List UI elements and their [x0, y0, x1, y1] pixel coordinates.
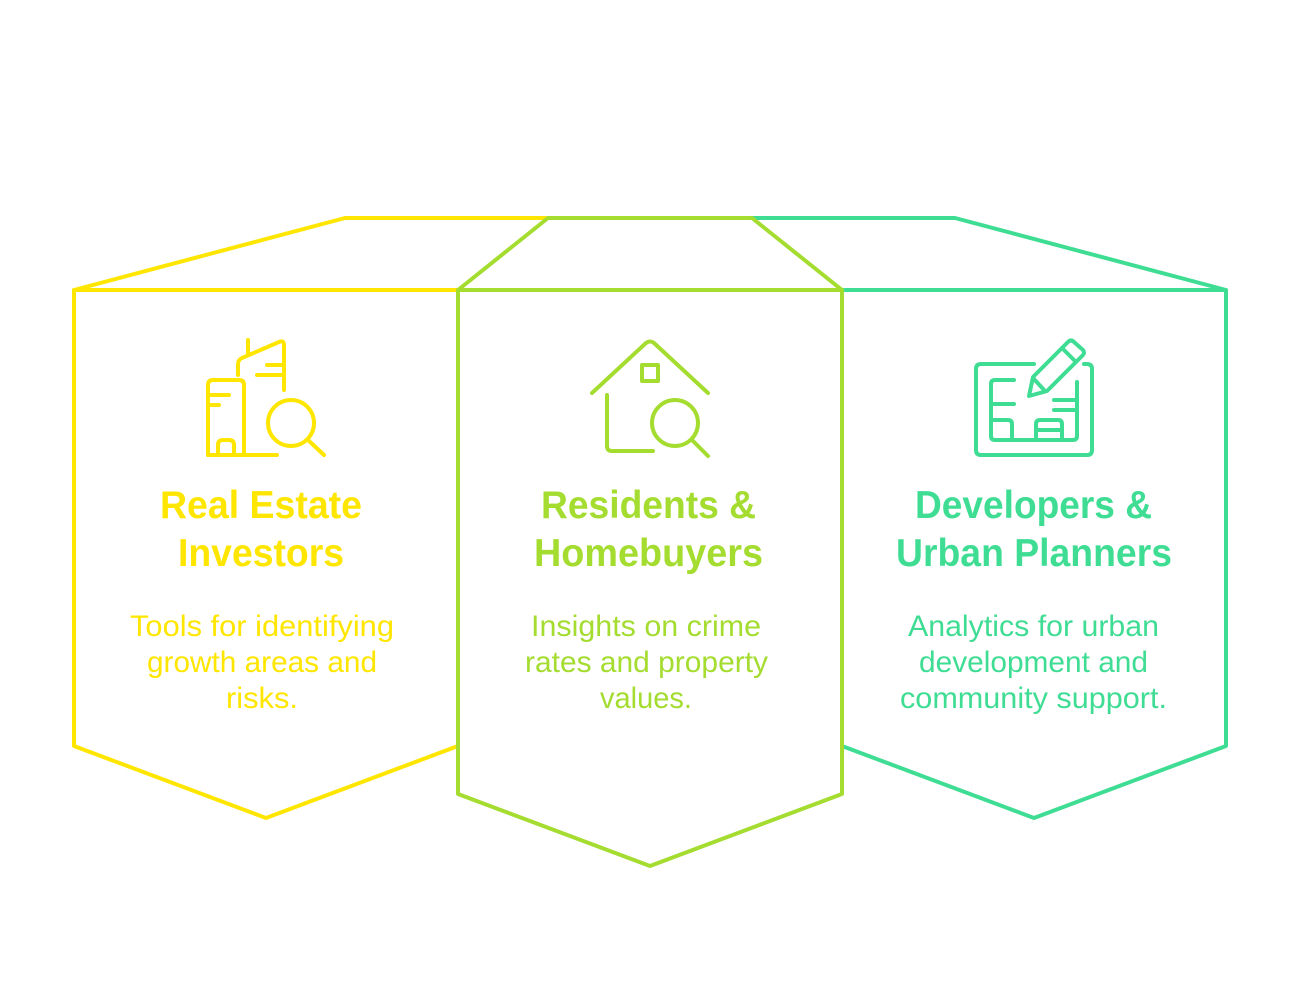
text: developers description: Analytics for urban	[908, 610, 1159, 643]
panel outline: real estate investors	[74, 218, 650, 818]
text: developers description: development and	[919, 646, 1148, 679]
icon: buildings with magnifier	[208, 340, 324, 455]
icon: house with magnifier	[592, 342, 708, 456]
text: residents description: Insights on crime	[531, 610, 761, 643]
text: real estate investors description: growth areas and	[147, 646, 377, 679]
heading: residents and homebuyers: Residents &	[541, 484, 756, 527]
panel: developers and urban planners	[650, 218, 1226, 818]
panel outline: residents and homebuyers	[458, 218, 842, 866]
text: developers description: community support.	[900, 682, 1167, 715]
panel outline: developers and urban planners	[650, 218, 1226, 818]
text: residents description: values.	[600, 682, 692, 715]
panel: residents and homebuyers	[458, 218, 842, 866]
text: residents description: rates and property	[525, 646, 768, 679]
heading: real estate investors: Real Estate	[160, 484, 362, 527]
heading: real estate investors: Investors	[178, 532, 344, 575]
text: real estate investors description: Tools for identifying	[130, 610, 394, 643]
heading: developers and urban planners: Developers &	[915, 484, 1152, 527]
icon: blueprint with pencil	[976, 340, 1092, 455]
heading: developers and urban planners: Urban Planners	[896, 532, 1172, 575]
heading: residents and homebuyers: Homebuyers	[534, 532, 763, 575]
panel: real estate investors	[74, 218, 650, 818]
text: real estate investors description: risks.	[226, 682, 298, 715]
